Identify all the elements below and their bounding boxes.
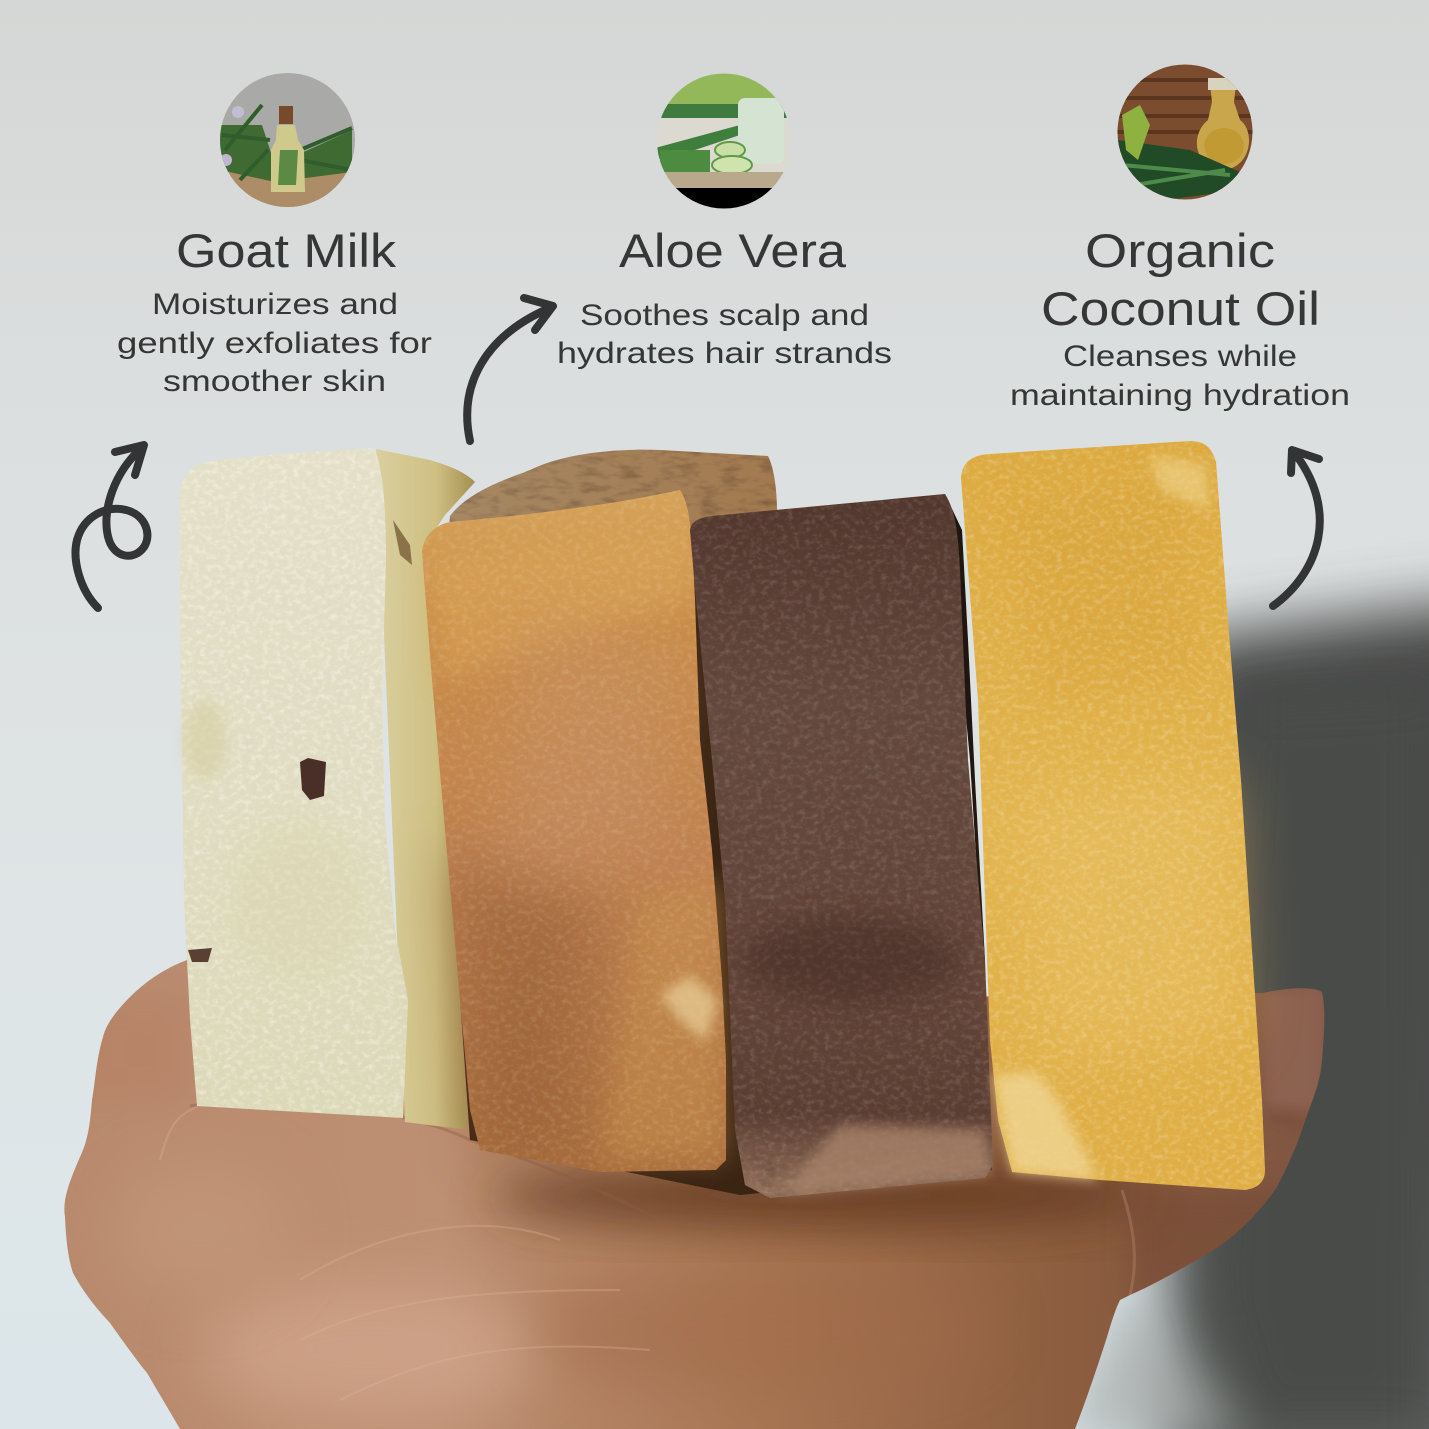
heading: organic coconut oil [1041,224,1320,335]
arrow: curved arrow to aloe vera text [467,298,553,441]
side face of goat milk bar [376,449,475,1130]
heading: organic coconut oil: Organic [1085,224,1275,277]
arrow: curved arrow to coconut oil text [1273,450,1320,606]
icon: aloe vera jar [655,70,795,210]
text: goat milk benefit: gently exfoliates for [117,327,432,360]
text: aloe vera benefit: Soothes scalp and [580,299,869,332]
text: goat milk benefit [117,288,432,398]
soap: aloe vera bar [422,490,726,1172]
text: goat milk benefit: Moisturizes and [152,288,398,321]
text: aloe vera benefit: hydrates hair strands [557,337,892,370]
front face of goat milk bar [180,448,408,1118]
soap: organic coconut oil bar [961,441,1265,1190]
text: coconut oil benefit: Cleanses while [1063,340,1297,373]
heading: aloe vera: Aloe Vera [619,224,847,277]
icon: rosemary oil bottle [218,70,358,212]
icon: coconut oil bottle [1115,62,1255,202]
soap: goat milk bar [180,448,475,1130]
heading: organic coconut oil: Coconut Oil [1041,282,1320,335]
text: coconut oil benefit: maintaining hydration [1010,379,1350,412]
text: goat milk benefit: smoother skin [163,365,386,398]
shadow gaps between soap bars [430,530,992,1195]
soap: back bar top [445,450,777,570]
text: coconut oil benefit [1010,340,1350,412]
heading: goat milk: Goat Milk [176,224,397,277]
soap: dark bar [690,494,993,1198]
arrow: looping arrow by goat milk [76,445,147,608]
text: aloe vera benefit [557,299,892,370]
hand holding soaps [60,960,1325,1429]
